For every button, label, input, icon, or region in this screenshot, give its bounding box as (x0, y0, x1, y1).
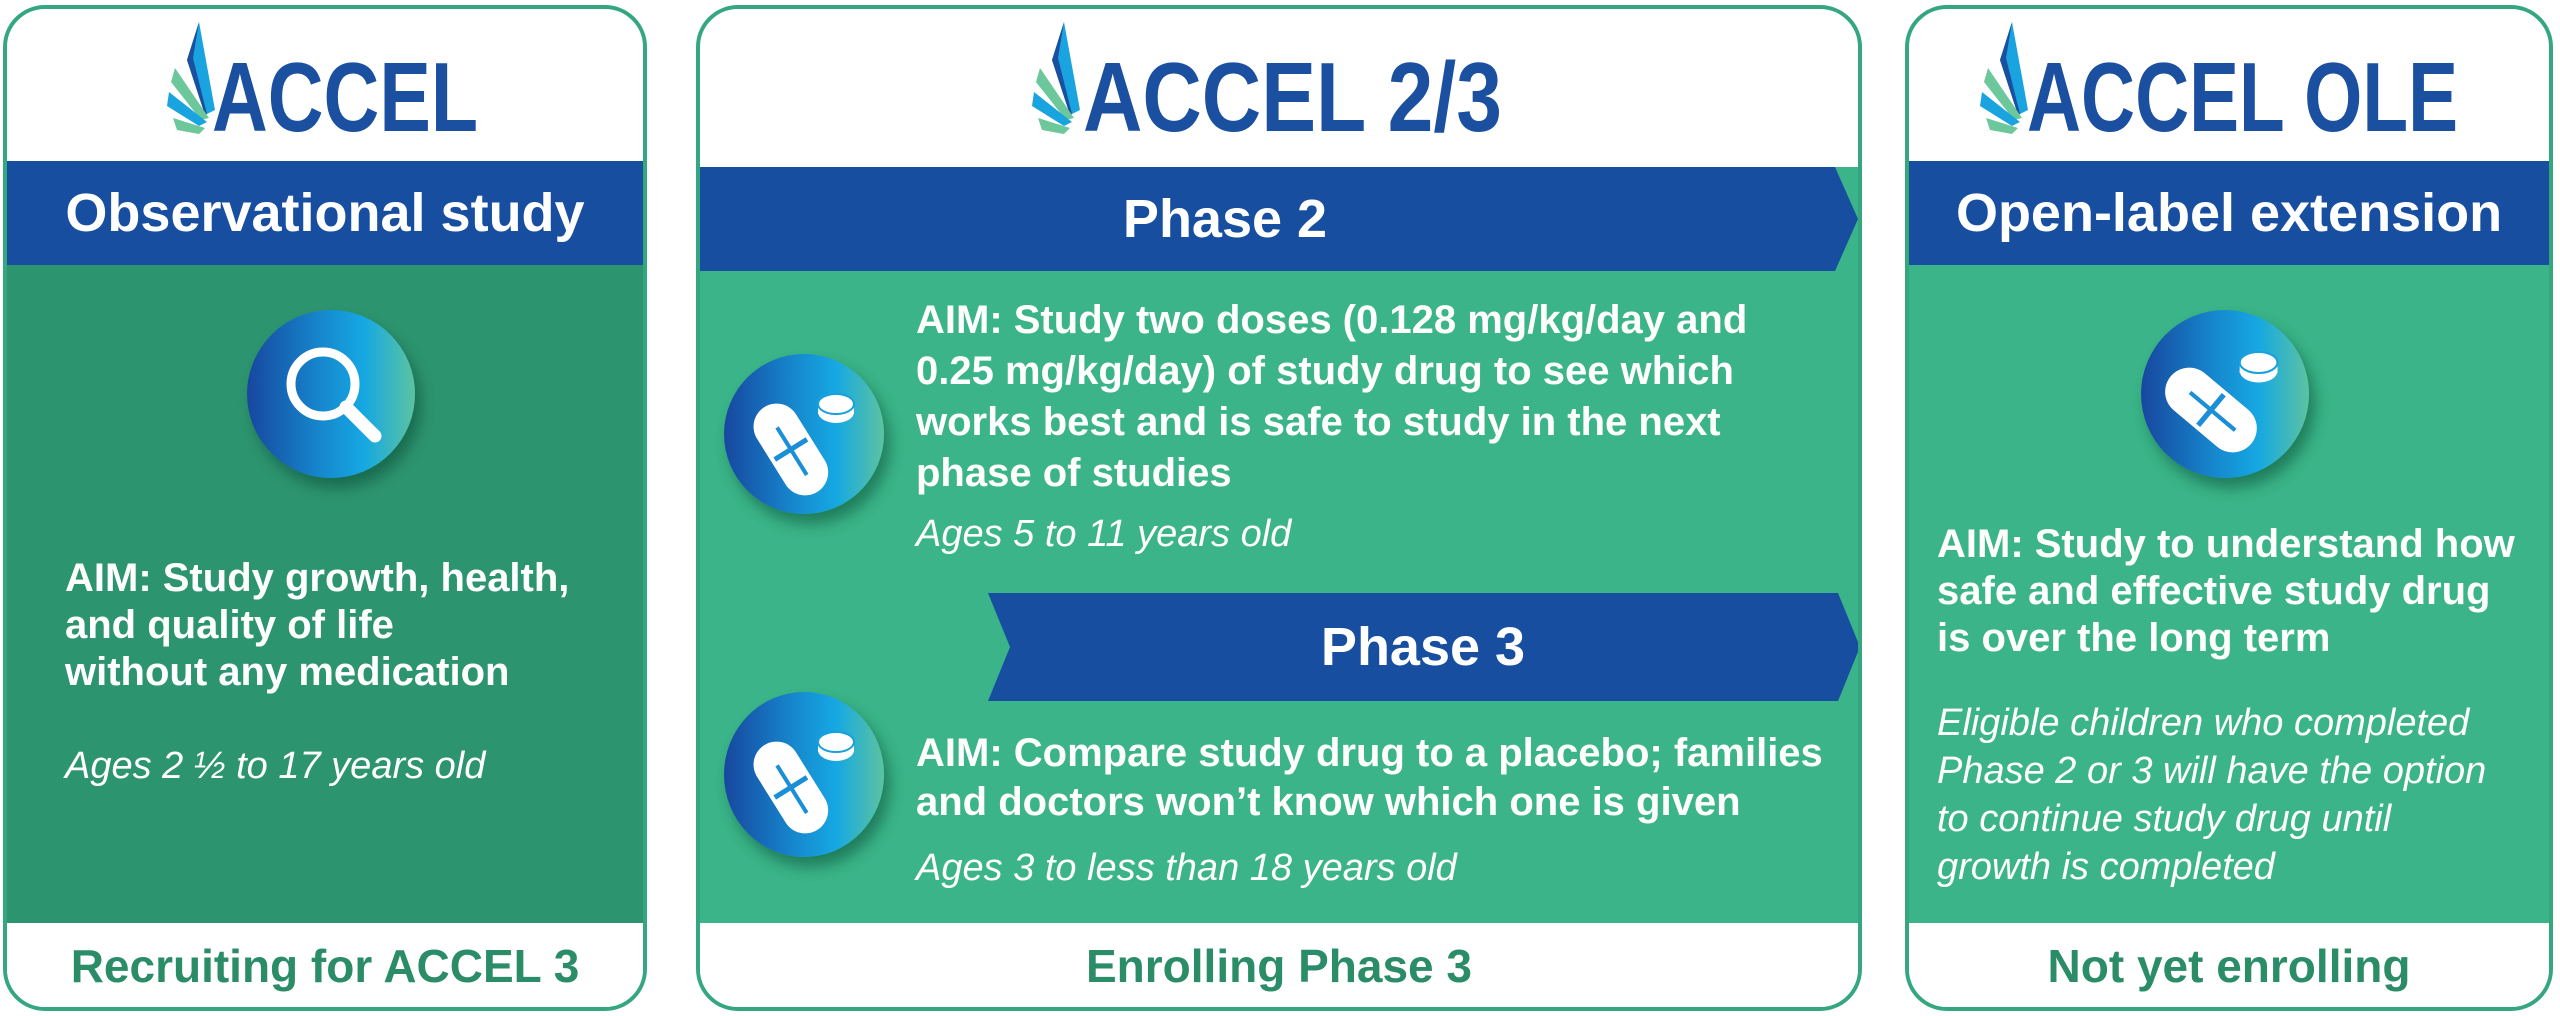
text: eligibility: Eligible children who completed (1937, 702, 2469, 744)
heading: Open-label extension (1909, 161, 2549, 265)
text: aim: and quality of life (65, 603, 394, 647)
arrow: Phase 3 (988, 593, 1858, 701)
text: phase 2 aim: AIM: Study two doses (0.128 mg/kg/day and (916, 298, 1747, 342)
panel: ACCEL OLE (1905, 5, 2553, 1011)
text: aim: is over the long term (1937, 616, 2330, 660)
logo: ACCEL 2/3: ACCEL 2/3 (1083, 42, 1502, 150)
text: eligibility: Phase 2 or 3 will have the option (1937, 750, 2486, 792)
icon: pill 1 (724, 354, 884, 514)
footer: status (1909, 923, 2549, 1007)
text: phase 2 aim: 0.25 mg/kg/day) of study drug to see which (916, 349, 1734, 393)
footer: status: Not yet enrolling (2048, 940, 2410, 992)
text: phase 2 ages: Ages 5 to 11 years old (916, 513, 1291, 555)
logo: ACCEL: ACCEL (212, 42, 478, 150)
arrow: Phase 2: Phase 2 (1123, 189, 1327, 249)
heading: Open-label extension: Open-label extension (1956, 183, 2502, 243)
footer: status (700, 923, 1858, 1007)
icon: pill (2141, 310, 2309, 478)
footer: status: Enrolling Phase 3 (1086, 940, 1472, 992)
text: ages: Ages 2 ½ to 17 years old (65, 745, 485, 787)
footer: status (7, 923, 643, 1007)
panel body (7, 265, 643, 923)
footer: status: Recruiting for ACCEL 3 (71, 940, 579, 992)
heading: Observational study (7, 161, 643, 265)
text: aim: without any medication (65, 650, 509, 694)
text: phase 2 aim (916, 298, 1747, 495)
text: phase 2 aim: phase of studies (916, 451, 1232, 495)
text: phase 2 aim: works best and is safe to study in the next (916, 400, 1721, 444)
panel: ACCEL 2/3 (696, 5, 1862, 1011)
panel: ACCEL observational (3, 5, 647, 1011)
logos (167, 22, 2458, 150)
text: eligibility: growth is completed (1937, 846, 2275, 888)
text: aim (64, 556, 569, 694)
panel body (1909, 265, 2549, 923)
panel body (700, 167, 1858, 923)
text: phase 3 aim: and doctors won’t know which one is given (916, 780, 1741, 824)
logo: ACCEL (167, 22, 478, 152)
text: phase 3 ages: Ages 3 to less than 18 years old (916, 847, 1457, 889)
text: phase 3 aim: AIM: Compare study drug to a placebo; families (916, 731, 1823, 775)
text: aim (1937, 522, 2515, 660)
arrow: Phase 2 (700, 167, 1858, 271)
logo: ACCEL OLE (1980, 22, 2458, 152)
text: aim: AIM: Study to understand how (1937, 522, 2515, 566)
icon: pill 2 (724, 692, 884, 857)
icon: magnifier (247, 310, 415, 478)
text: eligibility: to continue study drug until (1937, 798, 2391, 840)
text: eligibility (1937, 702, 2486, 888)
arrow: Phase 3: Phase 3 (1321, 617, 1525, 677)
text: phase 3 aim (916, 731, 1823, 824)
text: aim: AIM: Study growth, health, (65, 556, 569, 600)
logo: ACCEL 2/3 (1032, 22, 1502, 152)
heading: Observational study: Observational study (65, 183, 585, 243)
text: aim: safe and effective study drug (1937, 569, 2490, 613)
